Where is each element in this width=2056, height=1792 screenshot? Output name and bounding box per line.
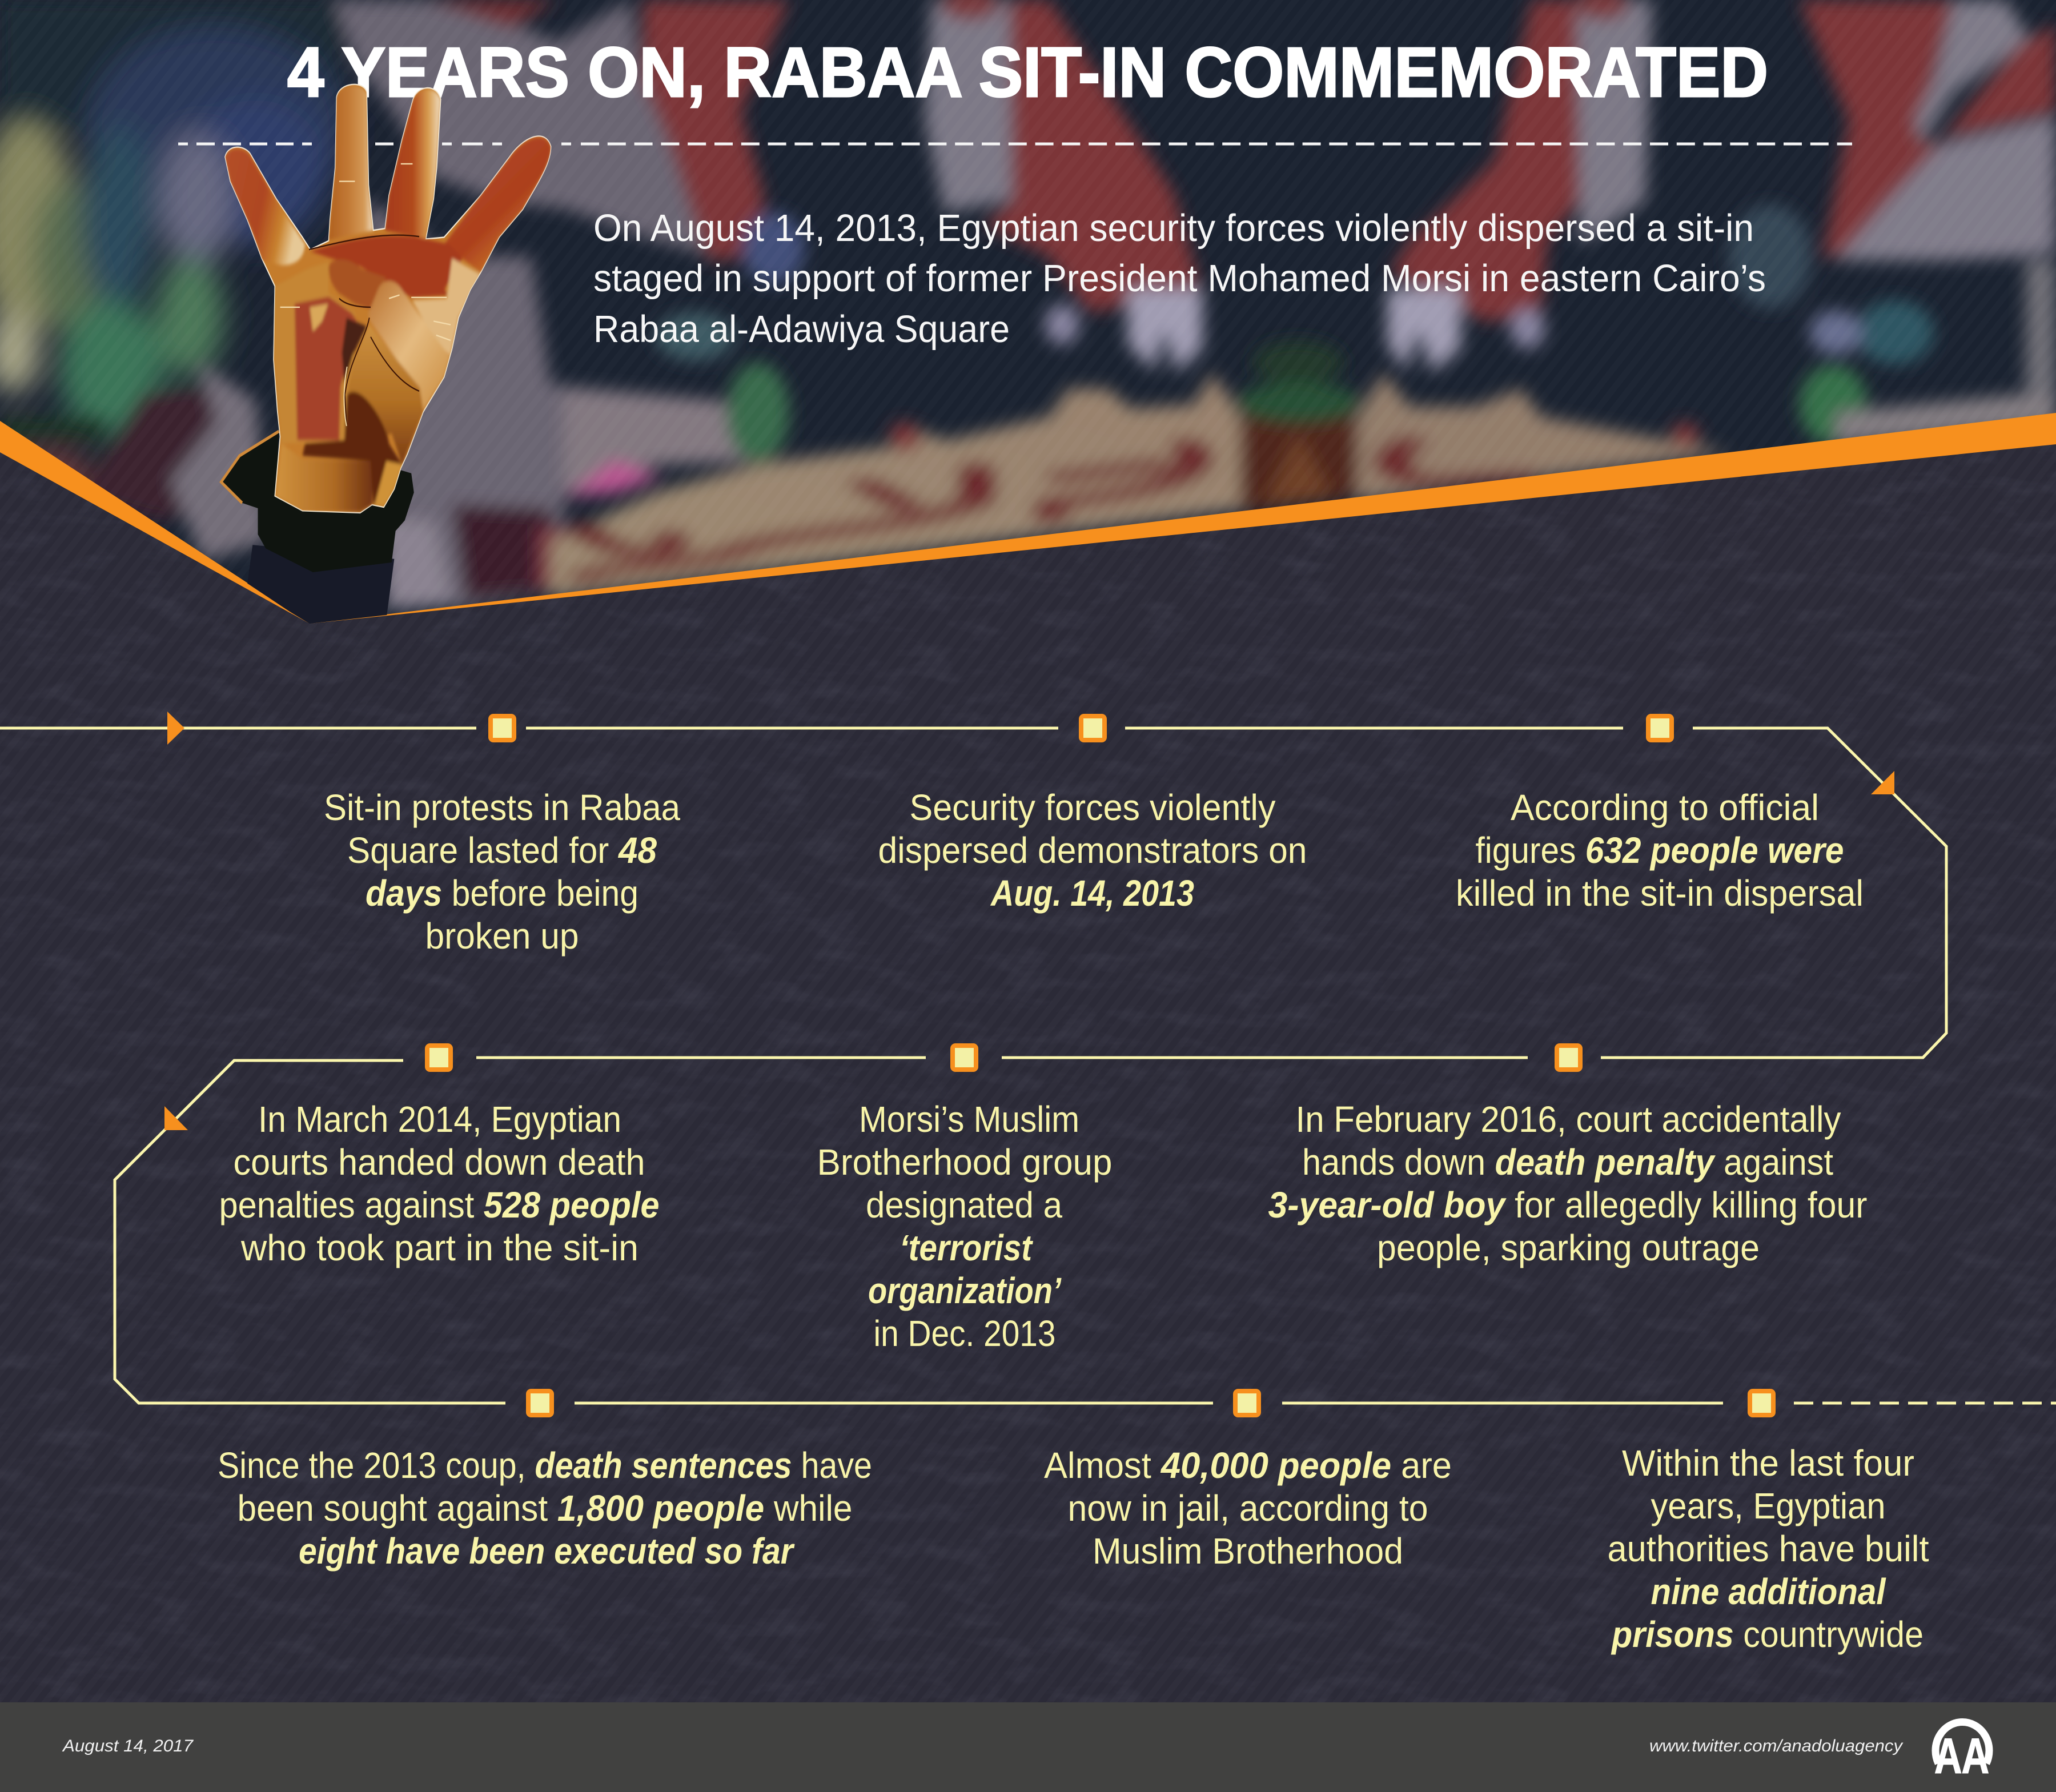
icon: AA logo: AA bbox=[1934, 1729, 1989, 1784]
arrow: turn down left bbox=[164, 1106, 188, 1130]
text block: dispersal date: Aug. 14, 2013 bbox=[990, 873, 1194, 914]
text block: terrorist designation: designated a bbox=[866, 1184, 1062, 1226]
text block: new prisons: nine additional bbox=[1651, 1571, 1886, 1612]
text block: sit-in duration: Square lasted for 48 bbox=[347, 830, 657, 871]
texture: diagonal stripes and mottling bbox=[0, 453, 2056, 1702]
text block: 3-year-old sentenced: people, sparking outrage bbox=[1377, 1227, 1760, 1268]
intro text: Rabaa al-Adawiya Square bbox=[593, 308, 1010, 351]
text block: sit-in duration: Sit-in protests in Rabaa bbox=[324, 787, 680, 828]
text block: official death toll bbox=[1456, 787, 1864, 914]
text block: new prisons: prisons countrywide bbox=[1611, 1614, 1924, 1655]
icon: raised hand making the four-finger Rabaa sign bbox=[221, 85, 551, 625]
text block: 3-year-old sentenced: 3-year-old boy for allegedly killing four bbox=[1268, 1184, 1868, 1226]
footer bar bbox=[0, 1702, 2056, 1792]
arm bbox=[247, 545, 394, 625]
text block: official death toll: killed in the sit-in dispersal bbox=[1456, 873, 1864, 914]
text block: terrorist designation bbox=[817, 1099, 1113, 1354]
text block: sit-in duration bbox=[324, 787, 680, 957]
text block: 3-year-old sentenced: hands down death penalty against bbox=[1302, 1142, 1833, 1183]
text block: official death toll: According to official bbox=[1511, 787, 1819, 828]
text block: dispersal date: dispersed demonstrators on bbox=[878, 830, 1307, 871]
text block: terrorist designation: Brotherhood group bbox=[817, 1142, 1113, 1183]
text block: terrorist designation: Morsi’s Muslim bbox=[859, 1099, 1079, 1140]
text block: people in jail: now in jail, according to bbox=[1068, 1488, 1428, 1529]
text block: March 2014 death penalties bbox=[219, 1099, 659, 1268]
text block: death sentences since coup: eight have been executed so far bbox=[299, 1530, 795, 1572]
text block: March 2014 death penalties: penalties against 528 people bbox=[219, 1184, 659, 1226]
footer social link: www.twitter.com/anadoluagency bbox=[1649, 1737, 1904, 1755]
header dashed divider bbox=[178, 143, 1852, 145]
intro text: On August 14, 2013, Egyptian security forces violently dispersed a sit-in bbox=[593, 207, 1754, 250]
text block: terrorist designation: organization’ bbox=[868, 1270, 1062, 1311]
sleeve cuff bbox=[221, 431, 414, 572]
text block: 3-year-old sentenced: In February 2016, court accidentally bbox=[1295, 1099, 1841, 1140]
intro text bbox=[593, 207, 1766, 351]
creases bbox=[309, 235, 419, 426]
text block: 3-year-old sentenced bbox=[1268, 1099, 1868, 1268]
text block: terrorist designation: ‘terrorist bbox=[900, 1227, 1033, 1268]
text block: new prisons: Within the last four bbox=[1622, 1443, 1914, 1484]
title: 4 YEARS ON, RABAA SIT-IN COMMEMORATED bbox=[287, 34, 1768, 112]
text block: March 2014 death penalties: In March 2014, Egyptian bbox=[258, 1099, 621, 1140]
text block: new prisons: years, Egyptian bbox=[1651, 1485, 1886, 1526]
arrow: turn down right bbox=[1871, 771, 1894, 794]
text block: death sentences since coup: been sought against 1,800 people while bbox=[238, 1488, 852, 1529]
intro text: staged in support of former President Mohamed Morsi in eastern Cairo’s bbox=[593, 257, 1766, 300]
orange chevron band bbox=[0, 413, 2056, 624]
text block: dispersal date bbox=[878, 787, 1307, 914]
text block: dispersal date: Security forces violently bbox=[909, 787, 1276, 828]
timeline markers bbox=[425, 714, 1776, 1417]
shaded hand volumes bbox=[225, 86, 551, 512]
text block: people in jail bbox=[1044, 1445, 1452, 1572]
hand silhouette bbox=[225, 85, 551, 513]
timeline connector lines bbox=[0, 728, 2056, 1403]
arrow: timeline start bbox=[167, 712, 184, 745]
text block: terrorist designation: in Dec. 2013 bbox=[874, 1313, 1055, 1354]
text block: death sentences since coup: Since the 2013 coup, death sentences have bbox=[218, 1445, 872, 1486]
hero background: blurred crowd with flags and banner bbox=[0, 0, 2056, 628]
text block: people in jail: Muslim Brotherhood bbox=[1093, 1530, 1403, 1572]
text block: death sentences since coup bbox=[218, 1445, 872, 1572]
text block: sit-in duration: broken up bbox=[425, 915, 579, 957]
text block: people in jail: Almost 40,000 people are bbox=[1044, 1445, 1452, 1486]
text block: March 2014 death penalties: courts handed down death bbox=[233, 1142, 645, 1183]
text block: new prisons: authorities have built bbox=[1607, 1528, 1929, 1569]
text block: new prisons bbox=[1607, 1443, 1929, 1655]
text block: official death toll: figures 632 people were bbox=[1476, 830, 1844, 871]
text block: March 2014 death penalties: who took part in the sit-in bbox=[240, 1227, 639, 1268]
text block: sit-in duration: days before being bbox=[366, 873, 639, 914]
footer date: August 14, 2017 bbox=[62, 1737, 194, 1755]
